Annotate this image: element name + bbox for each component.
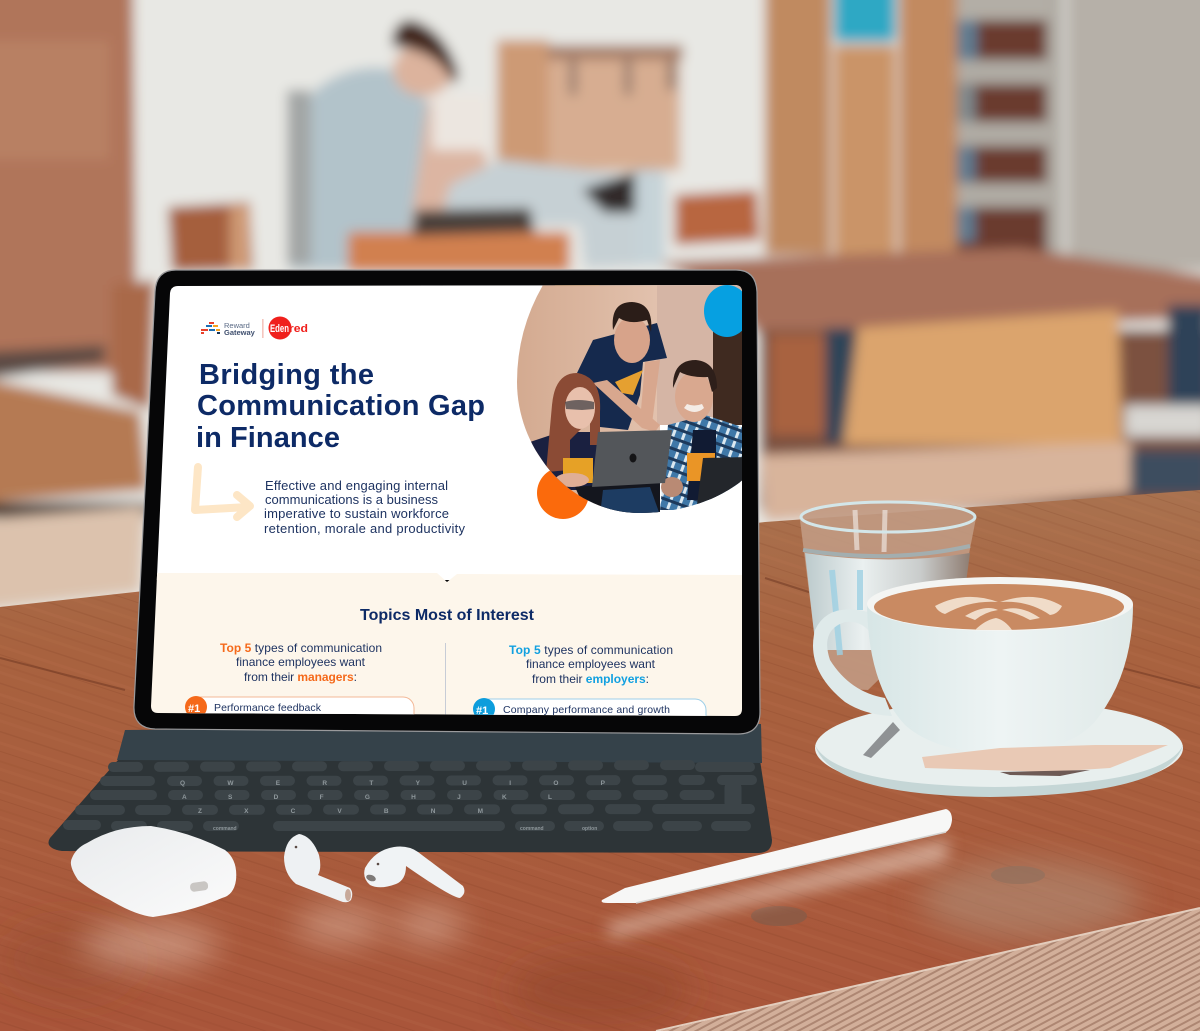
- key legends: QWERTYUIOP: [180, 780, 606, 787]
- plank seams: [0, 578, 1200, 690]
- tablet: [134, 270, 760, 739]
- blue blob: [704, 285, 742, 337]
- second laptop: [697, 457, 745, 505]
- right column intro: [509, 643, 673, 686]
- left column intro: from their managers:: [244, 670, 357, 684]
- standing man: [577, 302, 667, 432]
- latte art: [935, 597, 1062, 630]
- logos: Reward: [224, 321, 250, 330]
- section heading: Topics Most of Interest: [360, 607, 535, 624]
- water glass: [800, 502, 976, 690]
- right list item: Company performance and growth: [503, 704, 670, 716]
- right list item: [473, 698, 706, 716]
- yellow accent shape: [555, 285, 600, 286]
- left list item: Performance feedback: [214, 702, 322, 714]
- coffee surface: [874, 584, 1124, 630]
- intro text: communications is a business: [265, 492, 438, 507]
- coat rack: [497, 40, 549, 170]
- key legends: command: [213, 826, 237, 832]
- edenred logo: [268, 316, 308, 340]
- white page: [140, 280, 750, 580]
- right list item: #1: [476, 705, 488, 717]
- wood panels right: [765, 0, 831, 255]
- seated man right: [660, 360, 745, 510]
- logos: [201, 316, 308, 340]
- key legends: [180, 780, 606, 832]
- right column intro: from their employers:: [532, 672, 649, 686]
- left column intro: [220, 641, 382, 684]
- edenred logo: red: [289, 323, 308, 335]
- papers on desk: [440, 160, 665, 268]
- cup rim: [867, 577, 1133, 631]
- tablet body: [134, 270, 760, 734]
- team photo circle: [517, 285, 742, 513]
- column divider: [445, 643, 446, 718]
- sugar sachets: [922, 745, 1168, 776]
- keyboard hinge strip: [117, 724, 762, 763]
- reward gateway mark: [201, 322, 220, 334]
- cup bowl: [867, 592, 1133, 754]
- title: Communication Gap: [197, 390, 485, 422]
- title: in Finance: [196, 422, 340, 454]
- tablet screen: [151, 285, 742, 716]
- shelves: [957, 0, 1063, 255]
- coffee cup: [813, 577, 1133, 754]
- darker and faded areas: [0, 860, 1140, 1025]
- left list item: [185, 696, 414, 714]
- orange blob: [537, 467, 589, 519]
- right column intro: finance employees want: [526, 657, 656, 671]
- right column intro: Top 5 types of communication: [509, 643, 673, 657]
- logos: Gateway: [224, 328, 256, 337]
- keyboard folio: [48, 724, 772, 853]
- left earbud: [284, 834, 352, 902]
- wood wall panel left: [0, 0, 136, 372]
- saucer: [815, 700, 1183, 797]
- intro text: Effective and engaging internal: [265, 478, 448, 493]
- left column intro: finance employees want: [236, 655, 366, 669]
- key legends: ZXCVBNM: [198, 808, 483, 815]
- seated person: [288, 68, 428, 270]
- wooden table top: [0, 490, 1200, 1031]
- key rows: [68, 765, 755, 826]
- left chair back: [0, 506, 145, 610]
- seated woman: [530, 373, 600, 490]
- key legends: ASDFGHJKL: [182, 794, 552, 801]
- cup handle: [813, 609, 892, 716]
- right chair: [843, 310, 1122, 445]
- jeans and dark lap: [575, 483, 660, 513]
- title: Bridging the: [199, 359, 374, 391]
- open laptop: [592, 430, 672, 487]
- right earbud: [364, 847, 464, 898]
- left list item: #1: [188, 703, 200, 715]
- apple pencil: [602, 809, 952, 903]
- key legends: option: [582, 826, 597, 832]
- table edge lighter band: [656, 908, 1200, 1031]
- table reflections: [80, 838, 950, 967]
- cream section: [145, 573, 745, 720]
- intro text: [264, 478, 466, 536]
- title: [198, 363, 484, 448]
- key legends: command: [520, 826, 544, 832]
- airpods case: [71, 826, 236, 917]
- intro text: imperative to sustain workforce: [264, 506, 449, 521]
- back table: [660, 248, 1200, 335]
- coffee spoon: [863, 722, 900, 758]
- orange seat: [348, 232, 570, 272]
- left background table: [0, 378, 148, 503]
- chair behind tablet: [168, 202, 253, 272]
- wood knots: [751, 906, 807, 926]
- edenred logo: Eden: [270, 323, 289, 335]
- intro text: retention, morale and productivity: [264, 521, 466, 536]
- arrow: [195, 467, 250, 517]
- left column intro: Top 5 types of communication: [220, 641, 382, 655]
- blurred cafe background: [0, 0, 1200, 620]
